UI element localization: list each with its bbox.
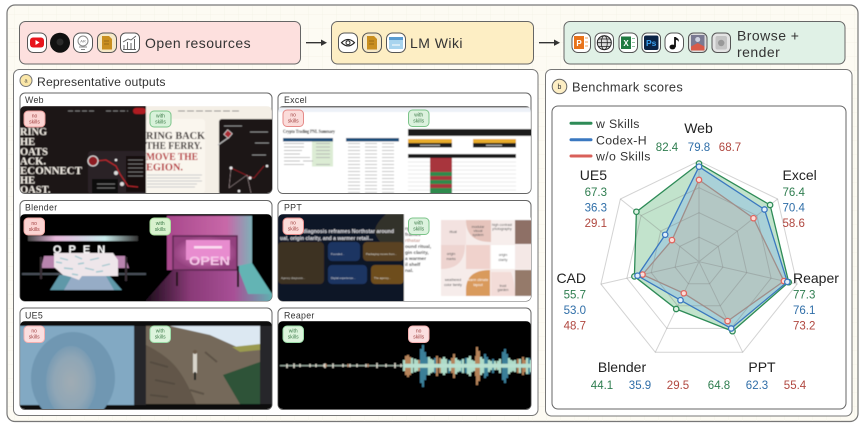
legend: Codex-H [596, 133, 647, 147]
badge: no skills: no [31, 328, 37, 334]
labels: Reaper: 77.3 [793, 290, 815, 302]
screenshot: web: ECONNECT [20, 166, 82, 177]
icon: music note [665, 33, 684, 52]
icon: chart [120, 33, 140, 52]
card: Blender [20, 200, 272, 302]
badge: no skills [408, 326, 429, 342]
labels: UE5 [580, 167, 607, 230]
screenshot: ppt: modular [472, 225, 485, 229]
screenshot: ppt: weathered [445, 278, 461, 282]
labels: Web: 68.7 [719, 142, 741, 154]
badge: with skills: skills [288, 334, 299, 340]
badge: with skills [150, 326, 170, 342]
labels: Excel: 58.6 [782, 218, 805, 230]
labels: Excel: Excel [782, 167, 817, 183]
screenshot: web: RING [20, 127, 47, 138]
badge: no skills: skills [29, 227, 40, 233]
screenshot: ppt: ual, origin clarity, and a warmer retail... [280, 236, 373, 242]
labels: PPT: PPT [748, 359, 776, 375]
badge: with skills [283, 326, 304, 342]
legend [571, 117, 651, 164]
badge: no skills: no [290, 112, 296, 118]
radar grid [601, 161, 797, 352]
screenshot: ppt: ritual [449, 230, 457, 234]
badge: with skills: with [156, 221, 165, 227]
labels: Web: 82.4 [656, 142, 679, 154]
screenshot: web: RING BACK [146, 131, 206, 142]
screenshot: ppt: ound ritual, [405, 244, 432, 250]
badge: with skills: skills [155, 120, 166, 126]
screenshot: ppt: photography [492, 227, 512, 231]
panel b: benchmark scores [546, 70, 852, 416]
labels: Blender: 44.1 [591, 380, 613, 392]
labels: Reaper: Reaper [793, 270, 839, 286]
panel: open resources [20, 22, 300, 64]
labels: CAD: CAD [556, 270, 586, 286]
heading: LM Wiki: LM Wiki [410, 35, 463, 51]
labels: UE5: 67.3 [585, 187, 607, 199]
screenshot: ppt: system [472, 233, 484, 237]
screenshot: ppt: trust [500, 284, 506, 288]
icon: GitHub [50, 33, 70, 53]
screenshot: ppt: The agency... [374, 276, 391, 280]
screenshot: ppt: origin [499, 253, 507, 257]
badge: with skills: with [414, 112, 423, 118]
badge: with skills: skills [155, 334, 166, 340]
panel: LM Wiki [332, 22, 534, 64]
card: UE5 [20, 308, 272, 410]
badge: no skills: no [290, 220, 296, 226]
label: UE5: UE5 [25, 310, 43, 320]
badge: with skills [150, 218, 170, 235]
screenshot: excel: Crypto Trading PNL Summary [283, 130, 335, 135]
icon: badge a: a [24, 78, 28, 84]
screenshot: web: MOVE THE [146, 152, 198, 163]
labels: Blender [591, 359, 689, 392]
icon: PowerPoint [572, 33, 590, 52]
label: Reaper: Reaper [284, 310, 315, 320]
screenshot: blender [20, 214, 272, 302]
screenshot: ppt: Founded... [331, 252, 345, 256]
icon: Photoshop [642, 33, 660, 52]
icon: document [98, 33, 116, 52]
icon: badge b: b [558, 84, 562, 91]
screenshot: ppt: a warmer [405, 256, 426, 262]
badge: with skills: skills [155, 227, 166, 233]
screenshot: ppt: gin clarity, [405, 250, 429, 256]
badge: no skills: no [416, 328, 422, 334]
badge: with skills [408, 218, 429, 234]
badge: no skills: no [32, 114, 37, 120]
badge: no skills [24, 326, 44, 342]
labels: Reaper: 73.2 [793, 320, 815, 332]
screenshot: excel [278, 106, 532, 194]
screenshot: ppt: garden [498, 288, 508, 292]
screenshot: web: OATS [20, 147, 48, 158]
panel a: representative outputs [14, 70, 538, 424]
screenshot: web: HE [20, 137, 35, 148]
chart box [552, 106, 846, 409]
labels: UE5: 36.3 [585, 202, 607, 214]
badge: with skills: skills [413, 118, 425, 124]
badge: with skills [408, 110, 429, 126]
badge: with skills: with [156, 328, 165, 334]
badge: no skills: skills [288, 226, 299, 232]
icon: browser code [386, 33, 406, 52]
badge: no skills: skills [288, 118, 299, 124]
labels: Blender: 35.9 [629, 380, 651, 392]
waveform: reaper audio [278, 321, 531, 410]
screenshot: ppt: Agency diagnosis... [281, 276, 305, 280]
screenshot: web: OAST. [20, 185, 51, 196]
icon: eye [338, 33, 358, 52]
heading: browse + render: render [737, 44, 780, 60]
labels: Excel: 76.4 [782, 187, 805, 199]
screenshot: ppt: rthstar [405, 238, 420, 244]
screenshot: ppt: rgin [405, 226, 414, 232]
card: Excel [278, 93, 532, 194]
labels: PPT: 64.8 [708, 380, 730, 392]
screenshot: web: EGION. [146, 162, 183, 174]
icon: AI brain [74, 33, 92, 52]
icon: document [362, 33, 382, 52]
icon: PowerPoint: P [576, 39, 582, 48]
labels: PPT: 62.3 [746, 380, 768, 392]
arrow: wiki to browse [539, 40, 560, 46]
labels: Blender: Blender [598, 359, 646, 375]
labels: Blender: 29.5 [667, 380, 689, 392]
labels: CAD: 53.0 [564, 305, 586, 317]
badge: no skills [283, 110, 304, 126]
labels: PPT [708, 359, 807, 392]
badge: no skills [283, 218, 304, 234]
panel: browse and render [564, 22, 845, 64]
labels: CAD: 55.7 [564, 290, 586, 302]
labels: UE5: 29.1 [585, 218, 607, 230]
badge: with skills: with [156, 114, 165, 120]
label: PPT: PPT [284, 202, 302, 212]
badge: no skills: no [31, 221, 37, 227]
heading: open resources: Open resources [145, 35, 251, 51]
icon: YouTube [28, 33, 46, 52]
series: Codex-H [635, 164, 790, 331]
labels: Reaper: 76.1 [793, 305, 815, 317]
heading: browse + render: Browse + [737, 28, 799, 44]
labels: PPT: 55.4 [784, 380, 807, 392]
heading: benchmark scores: Benchmark scores [572, 80, 683, 94]
series: w Skills [632, 161, 791, 334]
screenshot: ppt: clarity [498, 258, 508, 262]
legend: w Skills [595, 117, 640, 131]
label: Blender: Blender [25, 202, 57, 212]
icon: Excel [619, 33, 638, 52]
screenshot: blender: OPEN [53, 244, 112, 256]
badge: with skills: skills [413, 226, 425, 232]
label: Excel: Excel [284, 95, 307, 105]
card: Reaper [278, 308, 531, 410]
labels: Reaper [793, 270, 839, 332]
badge: no skills [24, 111, 45, 127]
labels: Web: Web [684, 120, 713, 136]
icon: Blender scene [688, 33, 707, 52]
screenshot: blender: OPEN [189, 254, 230, 268]
series: without Skills [640, 177, 787, 324]
heading: representative outputs: Representative outputs [37, 75, 166, 89]
screenshot: ppt: color family [444, 283, 462, 287]
screenshot: ppt: layout [473, 283, 483, 287]
radar chart [601, 161, 797, 352]
screenshot: ppt: frames [405, 232, 421, 238]
icon: badge b [552, 79, 567, 94]
screenshot: ppt [278, 214, 532, 302]
series fills [634, 164, 789, 331]
screenshot: web: HE [20, 176, 35, 186]
screenshot: web [20, 106, 274, 196]
screenshot: ppt: marks [446, 257, 456, 261]
labels: UE5: UE5 [580, 167, 607, 183]
label: Web: Web [25, 95, 44, 105]
icon: AI brain: AR [80, 38, 86, 44]
screenshot: ppt: nal. [405, 268, 413, 274]
screenshot: ppt: Digital experience... [331, 276, 356, 280]
labels: Excel [782, 167, 817, 230]
labels: CAD: 48.7 [564, 320, 586, 332]
screenshot: ppt: il shelf [405, 262, 421, 268]
screenshot: ppt: Packaging moves from... [366, 252, 397, 256]
badge: with skills [150, 111, 171, 127]
labels: CAD [556, 270, 586, 332]
screenshot: web: THE FERRY. [146, 141, 202, 152]
screenshot: ppt: diagnosis reframes Northstar around [303, 229, 394, 235]
heading: browse + render [737, 28, 799, 60]
labels: Web [656, 120, 741, 154]
screenshot: ppt: high contrast [492, 223, 512, 227]
arrow: resources to wiki [306, 40, 327, 46]
icon: globe [595, 33, 614, 52]
icon: CAD device [712, 33, 730, 52]
screenshot: ppt: visual [474, 229, 483, 233]
badge: with skills: with [289, 328, 298, 334]
labels: Web: 79.8 [688, 142, 710, 154]
badge: no skills: skills [29, 334, 40, 340]
legend: w/o Skills [595, 150, 651, 164]
icon: Excel: X [623, 39, 629, 48]
screenshot: ue5 [20, 321, 272, 409]
screenshot: ppt: warm climate [468, 278, 488, 282]
icon: Photoshop: Ps [646, 38, 657, 48]
card: Web [20, 93, 274, 196]
badge: no skills [24, 218, 44, 235]
badge: with skills: with [414, 220, 423, 226]
badge: no skills: skills [413, 334, 425, 340]
badge: no skills: skills [29, 120, 40, 126]
labels: Excel: 70.4 [782, 202, 805, 214]
screenshot: web: ACK. [20, 156, 46, 168]
screenshot: ppt: origin [447, 252, 455, 256]
icon: badge a [20, 74, 32, 86]
card: PPT [278, 200, 532, 302]
